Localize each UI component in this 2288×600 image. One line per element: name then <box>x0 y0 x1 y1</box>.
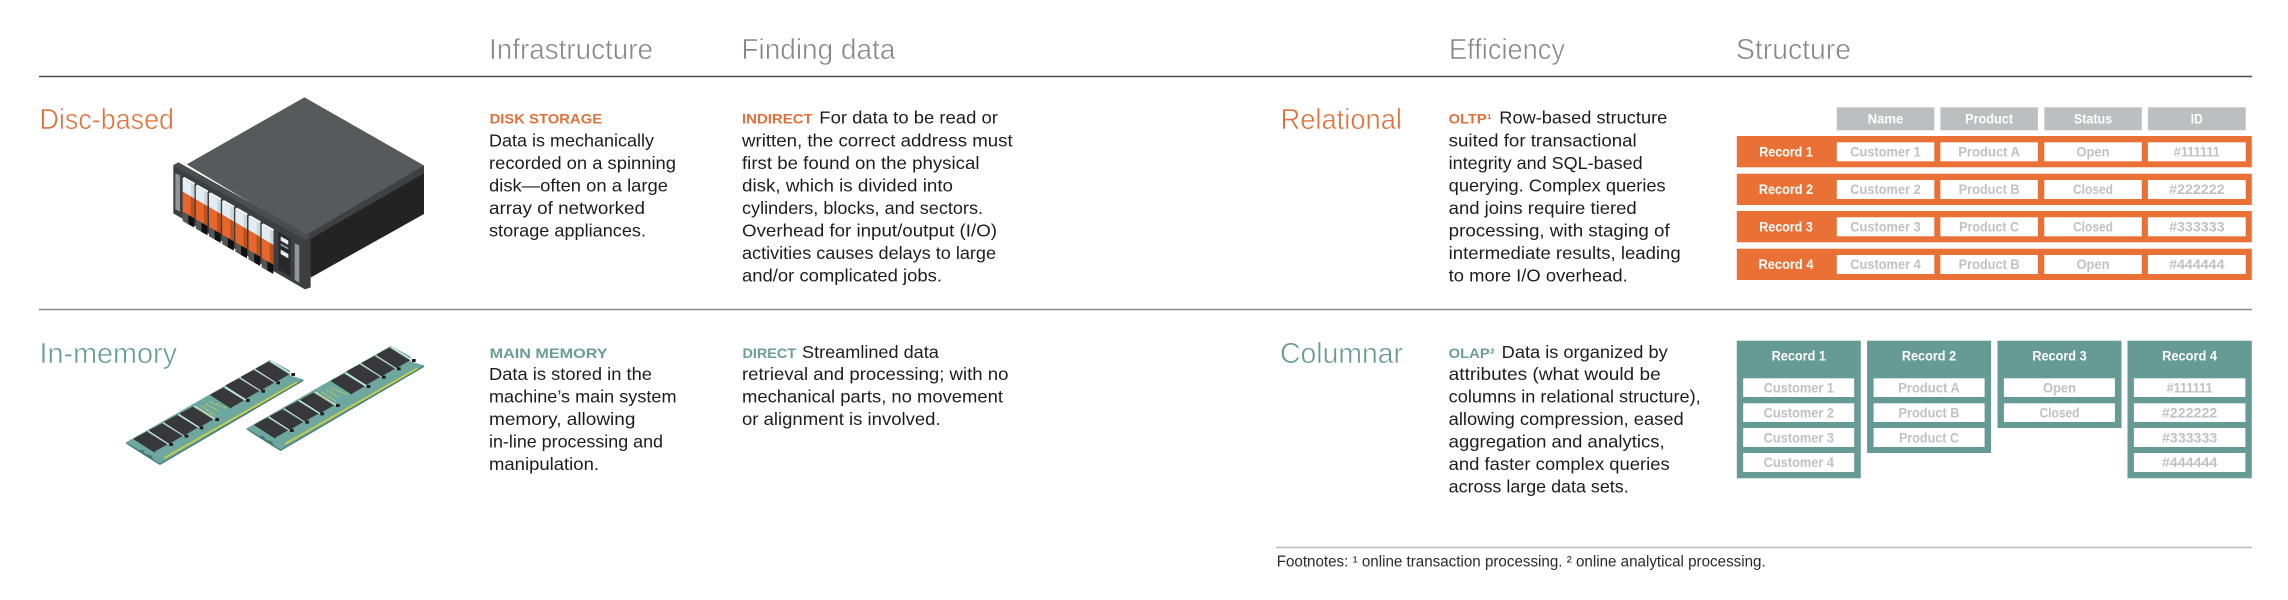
row heading: Relational: Relational <box>1280 104 1402 136</box>
relational table <box>1737 107 2252 280</box>
footnote rule <box>1276 546 2252 548</box>
column: status: Open <box>2043 381 2076 396</box>
text block: indirect <box>741 107 1013 286</box>
text block: disk storage: recorded on a spinning <box>489 153 676 173</box>
record row 4: #444444 <box>2169 257 2225 272</box>
column: products: Product A <box>1898 381 1960 396</box>
column: products: Record 2 <box>1902 348 1956 364</box>
text block: indirect: Overhead for input/output (I/O) <box>742 221 997 241</box>
text block: OLTP: and joins require tiered <box>1449 198 1637 218</box>
icon: memory modules <box>126 346 424 465</box>
column: customers <box>1737 341 1861 478</box>
column: customers: Record 1 <box>1772 348 1826 364</box>
record row 1: Product A <box>1958 144 2020 160</box>
text block: disk storage: storage appliances. <box>489 221 646 241</box>
column headers: ID <box>2191 112 2203 126</box>
text block: main memory: MAIN MEMORY <box>490 345 608 361</box>
text block: main memory: memory, allowing <box>489 409 635 429</box>
record row 3: Product C <box>1959 220 2019 234</box>
record row 3: Record 3 <box>1759 220 1813 234</box>
column: products <box>1867 341 1991 453</box>
record row 2: Product B <box>1959 182 2020 197</box>
text block: indirect: activities causes delays to large <box>742 243 996 263</box>
text block: main memory: in-line processing and <box>489 432 663 452</box>
heading: Finding data: Finding data <box>741 34 896 66</box>
column: customers: Customer 2 <box>1764 406 1834 420</box>
text block: OLAP: columns in relational structure), <box>1449 387 1701 407</box>
text block: OLTP: OLTP <box>1449 110 1487 126</box>
text block: disk storage <box>489 110 676 241</box>
record row 2: Record 2 <box>1759 182 1813 197</box>
column: status: Closed <box>2040 406 2080 420</box>
footnotes: Footnotes: ¹ online transaction processing. ² online analytical processing. <box>1277 554 1766 571</box>
record row 3 <box>1737 211 2252 242</box>
text block: disk storage: DISK STORAGE <box>490 110 602 126</box>
text block: OLTP: Row-based structure <box>1499 107 1667 127</box>
text block: direct: retrieval and processing; with no <box>742 364 1008 384</box>
text block: indirect: disk, which is divided into <box>742 176 953 196</box>
text block: OLAP: across large data sets. <box>1449 477 1629 497</box>
text block: indirect: For data to be read or <box>819 107 998 127</box>
text block: OLTP: processing, with staging of <box>1449 221 1670 241</box>
record row 2 <box>1737 174 2252 205</box>
row heading: In-memory: In-memory <box>40 338 177 370</box>
record row 1: Record 1 <box>1759 144 1813 160</box>
column: IDs: Record 4 <box>2162 348 2218 364</box>
column: customers: Customer 1 <box>1764 381 1834 396</box>
record row 1: #111111 <box>2174 144 2220 160</box>
text block: OLTP: querying. Complex queries <box>1449 176 1666 196</box>
text block: indirect: and/or complicated jobs. <box>742 266 942 286</box>
record row 4: Customer 4 <box>1850 257 1921 272</box>
text block: disk storage: array of networked <box>489 198 645 218</box>
text block: direct: mechanical parts, no movement <box>742 387 1003 407</box>
text block: direct: or alignment is involved. <box>742 409 941 429</box>
text block: indirect: INDIRECT <box>742 110 813 126</box>
text block: indirect: first be found on the physical <box>742 153 980 173</box>
text block: OLTP <box>1449 107 1681 286</box>
text block: direct <box>742 342 1008 429</box>
column: IDs: #222222 <box>2162 406 2217 420</box>
text block: OLTP: ¹ <box>1487 110 1492 126</box>
record row 2: Closed <box>2073 182 2113 197</box>
text block: OLAP: attributes (what would be <box>1449 364 1661 384</box>
column: IDs: #444444 <box>2162 455 2218 470</box>
column headers: Status <box>2074 112 2112 126</box>
row rule <box>39 308 2252 310</box>
record row 1: Customer 1 <box>1850 144 1921 160</box>
column headers <box>1837 107 2246 130</box>
record row 4: Record 4 <box>1758 257 1814 272</box>
text block: direct: Streamlined data <box>802 342 939 362</box>
heading: Infrastructure: Infrastructure <box>489 34 653 66</box>
column headers: Name <box>1868 112 1904 126</box>
record row 3: Customer 3 <box>1850 220 1921 234</box>
text block: disk storage: Data is mechanically <box>489 131 654 151</box>
column: IDs: #111111 <box>2167 381 2213 396</box>
column: products: Product C <box>1899 430 1959 446</box>
record row 4: Product B <box>1959 257 2020 272</box>
text block: OLAP: aggregation and analytics, <box>1449 432 1665 452</box>
text block: OLAP: allowing compression, eased <box>1449 409 1684 429</box>
columnar table <box>1737 341 2252 478</box>
column: customers: Customer 4 <box>1764 455 1834 470</box>
column headers: Product <box>1965 112 2014 126</box>
record row 3: Closed <box>2073 220 2113 234</box>
record row 2: #222222 <box>2169 182 2224 197</box>
text block: OLTP: suited for transactional <box>1449 131 1637 151</box>
column: customers: Customer 3 <box>1764 430 1834 446</box>
header rule <box>39 76 2252 78</box>
column: IDs <box>2128 341 2252 478</box>
column: status <box>1998 341 2122 428</box>
text block: direct: DIRECT <box>742 345 797 361</box>
text block: OLTP: integrity and SQL-based <box>1449 153 1643 173</box>
record row 4 <box>1737 249 2252 280</box>
column: products: Product B <box>1898 406 1960 420</box>
row heading: Columnar: Columnar <box>1280 338 1403 370</box>
text block: OLAP: ² <box>1490 345 1495 361</box>
text block: main memory: Data is stored in the <box>489 364 652 384</box>
column: status: Record 3 <box>2032 348 2087 364</box>
record row 1: Open <box>2076 144 2110 160</box>
text block: main memory: machine’s main system <box>489 387 676 407</box>
text block: OLAP: and faster complex queries <box>1449 454 1670 474</box>
record row 4: Open <box>2076 257 2110 272</box>
text block: OLTP: intermediate results, leading <box>1449 243 1681 263</box>
record row 1 <box>1737 136 2252 167</box>
text block: indirect: written, the correct address must <box>741 131 1013 151</box>
heading: Efficiency: Efficiency <box>1449 34 1565 66</box>
text block: disk storage: disk—often on a large <box>489 176 668 196</box>
heading: Structure: Structure <box>1736 34 1851 66</box>
text block: main memory: manipulation. <box>489 454 599 474</box>
row heading: Disc-based: Disc-based <box>40 104 174 136</box>
column: IDs: #333333 <box>2162 430 2218 446</box>
record row 2: Customer 2 <box>1850 182 1921 197</box>
text block: indirect: cylinders, blocks, and sectors. <box>742 198 983 218</box>
text block: OLAP: OLAP <box>1449 345 1490 361</box>
icon: disk storage server <box>173 97 424 289</box>
record row 3: #333333 <box>2169 220 2225 234</box>
text block: OLAP: Data is organized by <box>1502 342 1668 362</box>
text block: OLAP <box>1449 342 1701 497</box>
text block: main memory <box>489 345 676 474</box>
text block: OLTP: to more I/O overhead. <box>1449 266 1628 286</box>
